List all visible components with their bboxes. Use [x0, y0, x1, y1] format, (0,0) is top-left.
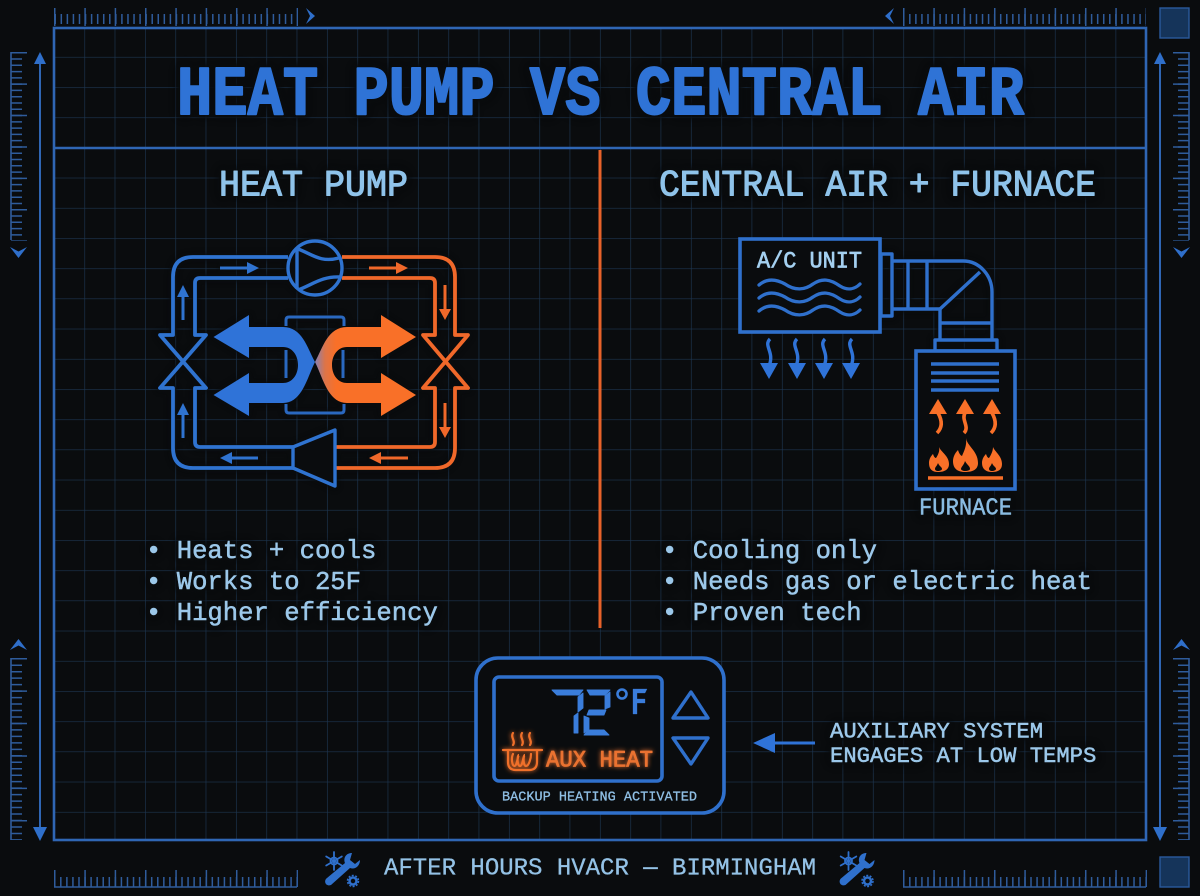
expansion nozzle: [293, 430, 335, 486]
bullet list: heat pump: • Higher efficiency: [146, 599, 438, 628]
backup heating caption: BACKUP HEATING ACTIVATED: [502, 790, 697, 806]
cooling waves: [759, 280, 860, 315]
right upper chevron: [1173, 247, 1190, 258]
left upper ruler: [11, 52, 19, 241]
left lower chevron: [10, 639, 27, 650]
arrow: callout to thermostat: [753, 733, 815, 753]
icon: right wrench, snowflake and gear: [840, 852, 874, 886]
bullet list: central air: [662, 537, 1092, 628]
bottom right ruler: [903, 878, 1147, 887]
top right ruler: [903, 17, 1146, 19]
bullet list: heat pump: • Works to 25F: [146, 568, 361, 597]
heat arrows: [929, 399, 1001, 433]
A/C label: A/C UNIT: [757, 248, 862, 274]
top left ruler chevron: [306, 8, 315, 24]
blue flow arrows: [177, 262, 259, 464]
right double arrow: [1153, 52, 1167, 841]
icon: cold air arrows: [760, 339, 860, 379]
thermostat screen: [494, 677, 662, 781]
center divider: [598, 150, 602, 628]
thermostat: [476, 658, 724, 813]
icon: left wrench, snowflake and gear: [325, 852, 360, 886]
heading: heat pump: HEAT PUMP: [219, 166, 408, 208]
bullet list: central air: • Proven tech: [662, 599, 862, 628]
callout: auxiliary system: ENGAGES AT LOW TEMPS: [830, 744, 1096, 769]
left upper chevron: [10, 247, 27, 258]
top left ruler: [54, 17, 298, 19]
icon: A/C unit: [740, 239, 880, 332]
title: HEAT PUMP VS CENTRAL AIR: [177, 57, 1024, 136]
icon: duct elbow: [881, 254, 997, 351]
right lower ruler: [1181, 658, 1189, 841]
icon: furnace: [916, 351, 1015, 489]
bullet list: central air: • Needs gas or electric heat: [662, 568, 1092, 597]
corner square: top right: [1160, 8, 1189, 38]
blue refrigerant lines and valve: [160, 257, 293, 468]
big blue arrows: [214, 315, 315, 416]
icon: aux heat coil: [503, 733, 542, 770]
footer: [325, 852, 874, 886]
panel: central air + furnace: [659, 166, 1096, 628]
burner bar: [928, 476, 1003, 480]
orange refrigerant lines and valve: [336, 257, 468, 468]
aux heat label: AUX HEAT: [546, 748, 653, 774]
footer text: AFTER HOURS HVACR — BIRMINGHAM: [384, 856, 816, 882]
callout: auxiliary system: [830, 720, 1096, 769]
left lower ruler: [11, 658, 19, 841]
right lower chevron: [1173, 639, 1190, 650]
flames: [929, 438, 1002, 472]
callout: auxiliary system: AUXILIARY SYSTEM: [830, 720, 1043, 744]
temperature readout: 72°F: [552, 689, 647, 735]
top right ruler chevron: [885, 8, 894, 24]
furnace label: FURNACE: [919, 496, 1012, 522]
right upper ruler: [1181, 52, 1189, 241]
button: up: [673, 692, 708, 718]
title divider: [54, 147, 1146, 149]
heat exchanger bracket: [286, 317, 344, 413]
orange flow arrows: [369, 262, 451, 464]
left double arrow: [33, 52, 47, 841]
big orange arrows: [315, 315, 416, 416]
compressor: [288, 241, 342, 295]
bullet list: heat pump: • Heats + cools: [146, 537, 376, 566]
bullet list: heat pump: [146, 537, 438, 628]
bottom left ruler: [54, 878, 298, 887]
thermostat body: [476, 658, 724, 813]
furnace louvers: [931, 364, 999, 390]
heading: central air + furnace: CENTRAL AIR + FURNACE: [659, 166, 1096, 208]
diagram: refrigerant loop: [160, 241, 468, 486]
bullet list: central air: • Cooling only: [662, 537, 877, 566]
panel: heat pump: [146, 166, 468, 628]
corner square: bottom right: [1160, 857, 1189, 887]
button: down: [673, 738, 708, 764]
